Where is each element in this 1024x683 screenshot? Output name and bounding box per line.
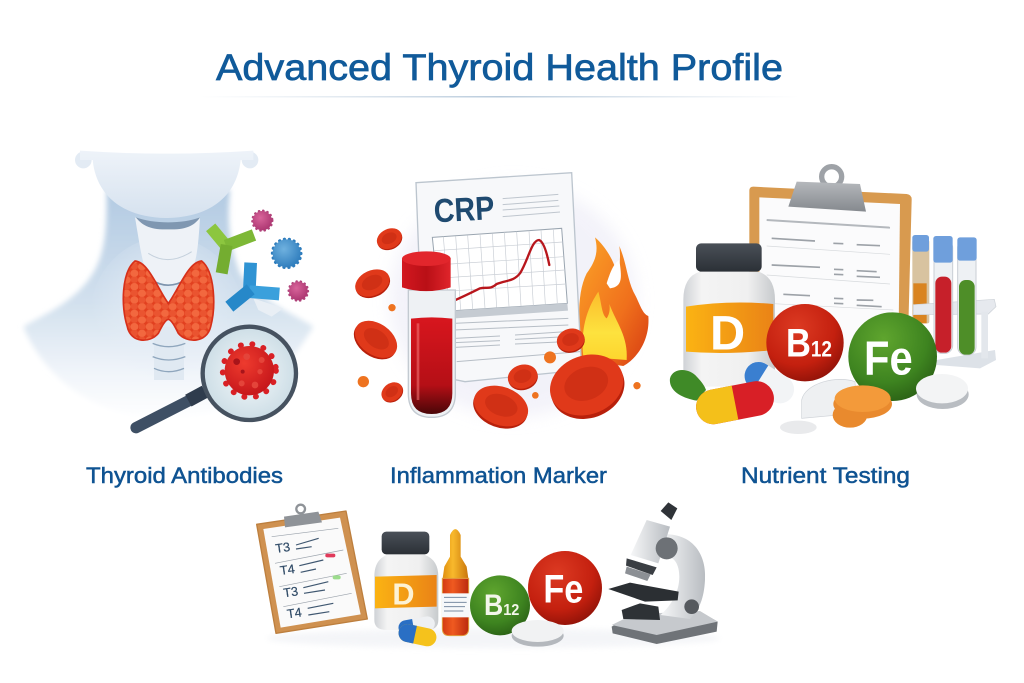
T3: T3 [274,540,291,556]
CRP curve [452,240,549,302]
title: Advanced Thyroid Health Profile [216,47,783,88]
chart box [432,228,567,312]
vitamin D bottle [683,243,775,387]
shirt collar [253,298,283,317]
panel: thyroid antibodies illustration [23,151,313,428]
neck highlight [90,237,243,397]
ampoule [442,529,470,636]
vitamin D bottle [374,532,438,630]
B12 ball: B12 [484,589,519,622]
white tablet [512,620,564,647]
thyroid gland [123,261,214,340]
T3: T3 [282,584,299,600]
green test tube [957,237,977,355]
Fe ball: Fe [543,567,583,611]
blue antibody [229,263,279,307]
label: thyroid antibodies: Thyroid Antibodies [86,463,283,488]
capsules [397,615,438,648]
microscope [608,502,718,644]
clipboard clip [788,167,866,212]
pink virus bottom [289,281,308,301]
gray axis band [440,303,568,319]
vitamin D bottle: D [392,577,414,611]
blue virus [272,239,301,268]
back tube [912,235,929,323]
Fe ball [848,312,937,401]
panel: nutrient testing illustration [670,167,996,434]
label: inflammation marker: Inflammation Marker [390,463,607,488]
trachea [153,327,185,380]
T4: T4 [279,562,296,578]
pink virus top [252,211,272,231]
red blood cells [347,224,633,436]
clipboard with T3 T4 results [257,505,367,633]
vitamin D bottle: D [710,306,745,360]
white tablet [916,374,969,409]
powder spill [780,421,817,434]
test tube rack [913,299,996,368]
B12 ball [470,575,530,635]
CRP report sheet [416,173,582,382]
Fe ball [528,551,602,625]
CRP heading: CRP [433,190,495,230]
panel: bottom summary illustration [257,502,720,648]
open tablet and orange tablet [802,379,892,428]
orange dots [358,304,641,399]
magnifying glass [136,327,296,428]
ground shadow [267,628,720,648]
neck and shoulders [23,190,313,420]
T4: T4 [286,605,303,621]
Fe ball: Fe [864,331,913,385]
clip [284,505,322,527]
B12 ball: B12 [786,322,832,366]
chin and ears [75,151,258,218]
soft shadow [390,183,637,417]
green antibody [211,227,254,273]
label: nutrient testing: Nutrient Testing [741,463,910,488]
blood test tube [402,251,455,417]
green pill [670,370,706,401]
B12 ball [766,304,844,381]
blue and white capsule [739,357,799,409]
flames [579,237,649,366]
clipboard with report [749,167,912,360]
red test tube [933,236,953,353]
panel: inflammation marker illustration [347,173,649,436]
yellow and red capsule [693,378,777,427]
larynx [135,217,200,285]
